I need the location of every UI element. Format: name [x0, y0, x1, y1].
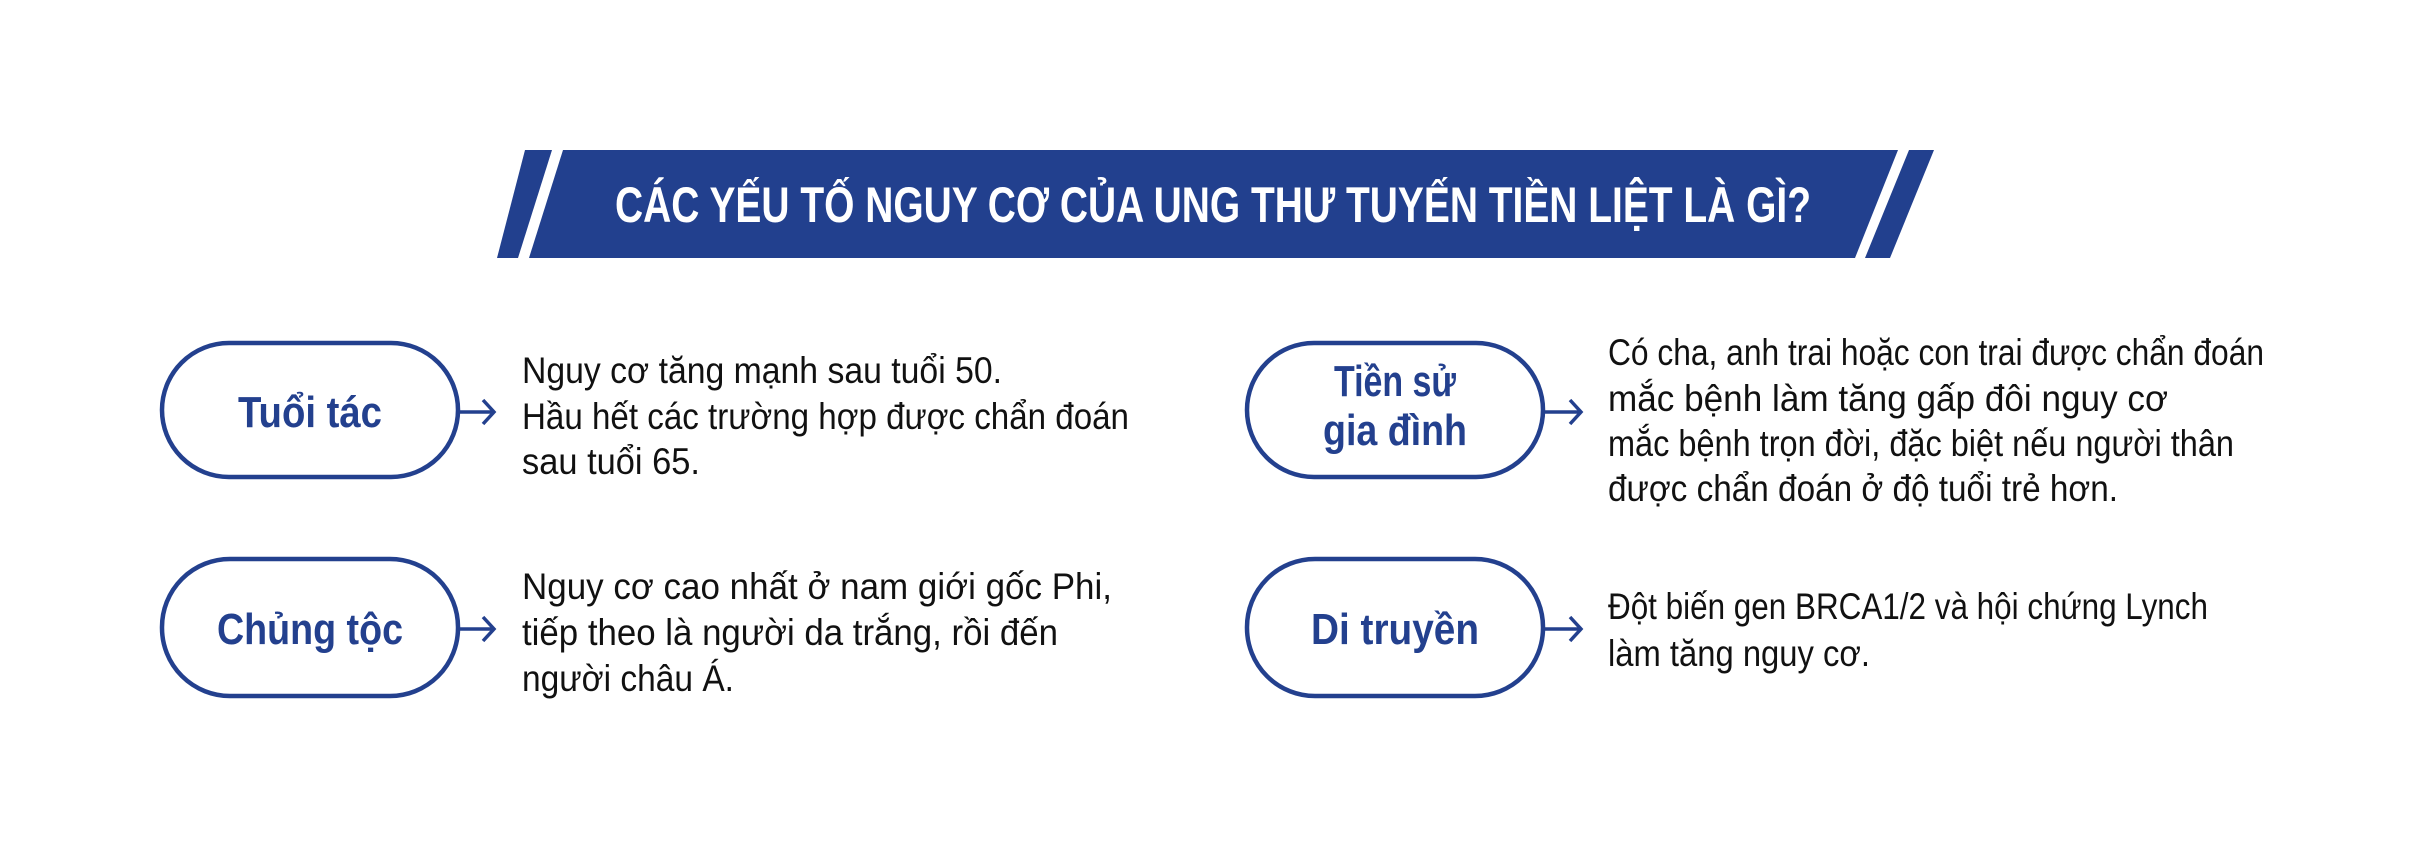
- text block: [1608, 332, 2264, 509]
- pill: Di truyền: [1247, 559, 1543, 696]
- text block: mắc bệnh làm tăng gấp đôi nguy cơ: [1608, 378, 2168, 419]
- text block: Hầu hết các trường hợp được chẩn đoán: [522, 396, 1129, 437]
- text block: được chẩn đoán ở độ tuổi trẻ hơn.: [1608, 468, 2118, 509]
- arrow: [1545, 617, 1581, 641]
- text block: sau tuổi 65.: [522, 441, 700, 482]
- text block: người châu Á.: [522, 658, 734, 699]
- panel: di truyen: Di truyền: [1311, 605, 1479, 654]
- panel: tuoi tac: Tuổi tác: [238, 388, 382, 437]
- text block: [1608, 586, 2208, 674]
- text block: Đột biến gen BRCA1/2 và hội chứng Lynch: [1608, 586, 2208, 627]
- pill: Tiền sử gia đình: [1247, 343, 1543, 477]
- panel: di truyen: [1247, 559, 2208, 696]
- panel: chung toc: Chủng tộc: [217, 605, 403, 654]
- text block: làm tăng nguy cơ.: [1608, 633, 1870, 674]
- panel: tien su gia dinh: gia đình: [1323, 406, 1467, 455]
- text block: Có cha, anh trai hoặc con trai được chẩn đoán: [1608, 332, 2264, 373]
- panel: chung toc: [162, 559, 1112, 699]
- text block: Nguy cơ cao nhất ở nam giới gốc Phi,: [522, 566, 1112, 607]
- text block: [522, 350, 1129, 482]
- arrow: [459, 617, 494, 641]
- panel: tien su gia dinh: [1247, 332, 2264, 509]
- title text: CÁC YẾU TỐ NGUY CƠ CỦA UNG THƯ TUYẾN TIỀN LIỆT LÀ GÌ?: [615, 176, 1811, 233]
- text block: [522, 566, 1112, 699]
- text block: tiếp theo là người da trắng, rồi đến: [522, 612, 1058, 653]
- arrow: [459, 400, 494, 424]
- panel: tien su gia dinh: Tiền sử: [1334, 357, 1456, 406]
- title banner: [497, 150, 1934, 258]
- pill: Chủng tộc: [162, 559, 458, 696]
- text block: mắc bệnh trọn đời, đặc biệt nếu người thân: [1608, 423, 2234, 464]
- pill: Tuổi tác: [162, 343, 458, 477]
- text block: Nguy cơ tăng mạnh sau tuổi 50.: [522, 350, 1002, 391]
- arrow: [1545, 400, 1581, 424]
- panel: tuoi tac: [162, 343, 1129, 482]
